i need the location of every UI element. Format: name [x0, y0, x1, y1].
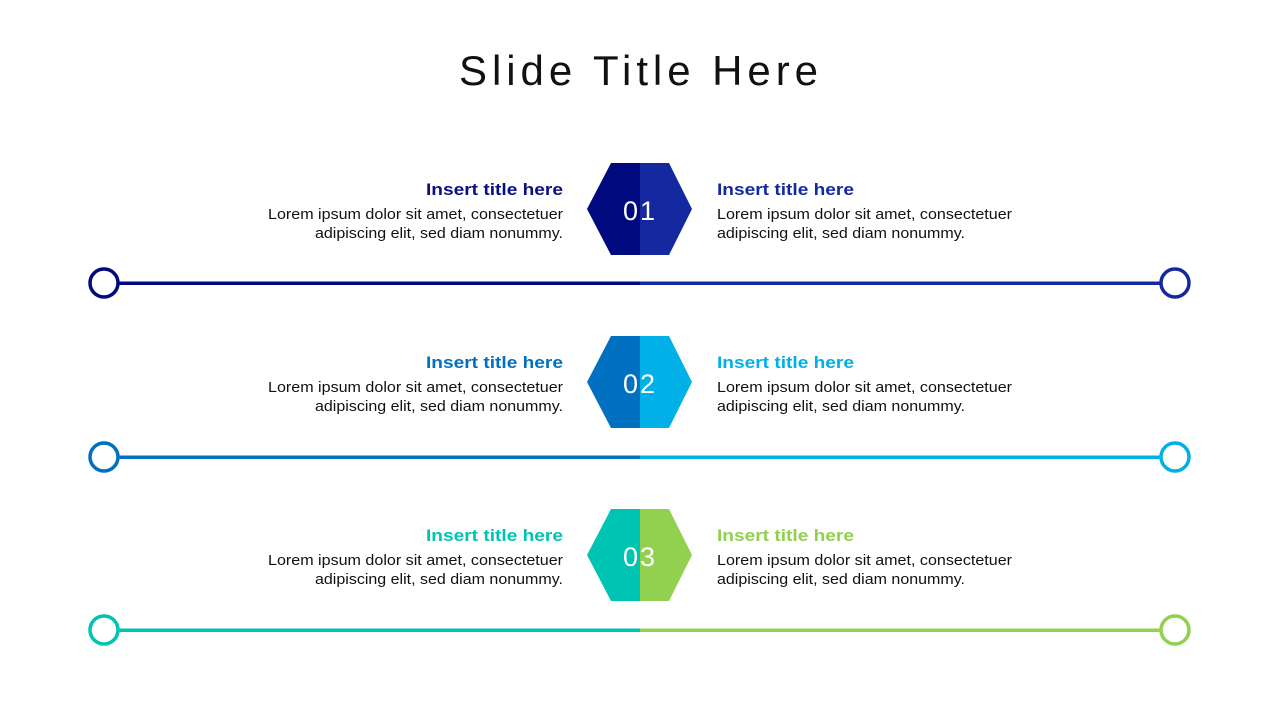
- right text 1: Lorem ipsum dolor sit amet, consectetuer: [717, 206, 1012, 223]
- title: Slide Title Here: [459, 47, 821, 94]
- row 3: [90, 509, 1189, 644]
- hexagon 02: [587, 336, 692, 428]
- right text 2: Lorem ipsum dolor sit amet, consectetuer: [717, 379, 1012, 396]
- left text 2: Insert title here: [426, 353, 563, 372]
- right text 1: adipiscing elit, sed diam nonummy.: [717, 225, 965, 242]
- left text 2: adipiscing elit, sed diam nonummy.: [315, 398, 563, 415]
- left text 2: Lorem ipsum dolor sit amet, consectetuer: [268, 379, 563, 396]
- right text 2: adipiscing elit, sed diam nonummy.: [717, 398, 965, 415]
- hexagon 02: 02: [623, 369, 657, 399]
- left text 1: Lorem ipsum dolor sit amet, consectetuer: [268, 206, 563, 223]
- right text 3: Lorem ipsum dolor sit amet, consectetuer: [717, 552, 1012, 569]
- timeline 2: [90, 443, 1189, 471]
- hexagon 03: 03: [623, 542, 657, 572]
- left text 1: Insert title here: [426, 180, 563, 199]
- hexagon 01: [587, 163, 692, 255]
- left text 3: Lorem ipsum dolor sit amet, consectetuer: [268, 552, 563, 569]
- right text 3: adipiscing elit, sed diam nonummy.: [717, 571, 965, 588]
- right text 2: [717, 353, 1012, 415]
- left text 3: Insert title here: [426, 526, 563, 545]
- right text 1: Insert title here: [717, 180, 854, 199]
- left text 3: [268, 526, 563, 588]
- left text 1: [268, 180, 563, 242]
- row 2: [90, 336, 1189, 471]
- row 1: [90, 163, 1189, 297]
- right text 3: [717, 526, 1012, 588]
- right text 3: Insert title here: [717, 526, 854, 545]
- left text 2: [268, 353, 563, 415]
- timeline 1: [90, 269, 1189, 297]
- left text 1: adipiscing elit, sed diam nonummy.: [315, 225, 563, 242]
- left text 3: adipiscing elit, sed diam nonummy.: [315, 571, 563, 588]
- hexagon 03: [587, 509, 692, 601]
- right text 2: Insert title here: [717, 353, 854, 372]
- right text 1: [717, 180, 1012, 242]
- hexagon 01: 01: [623, 196, 657, 226]
- timeline 3: [90, 616, 1189, 644]
